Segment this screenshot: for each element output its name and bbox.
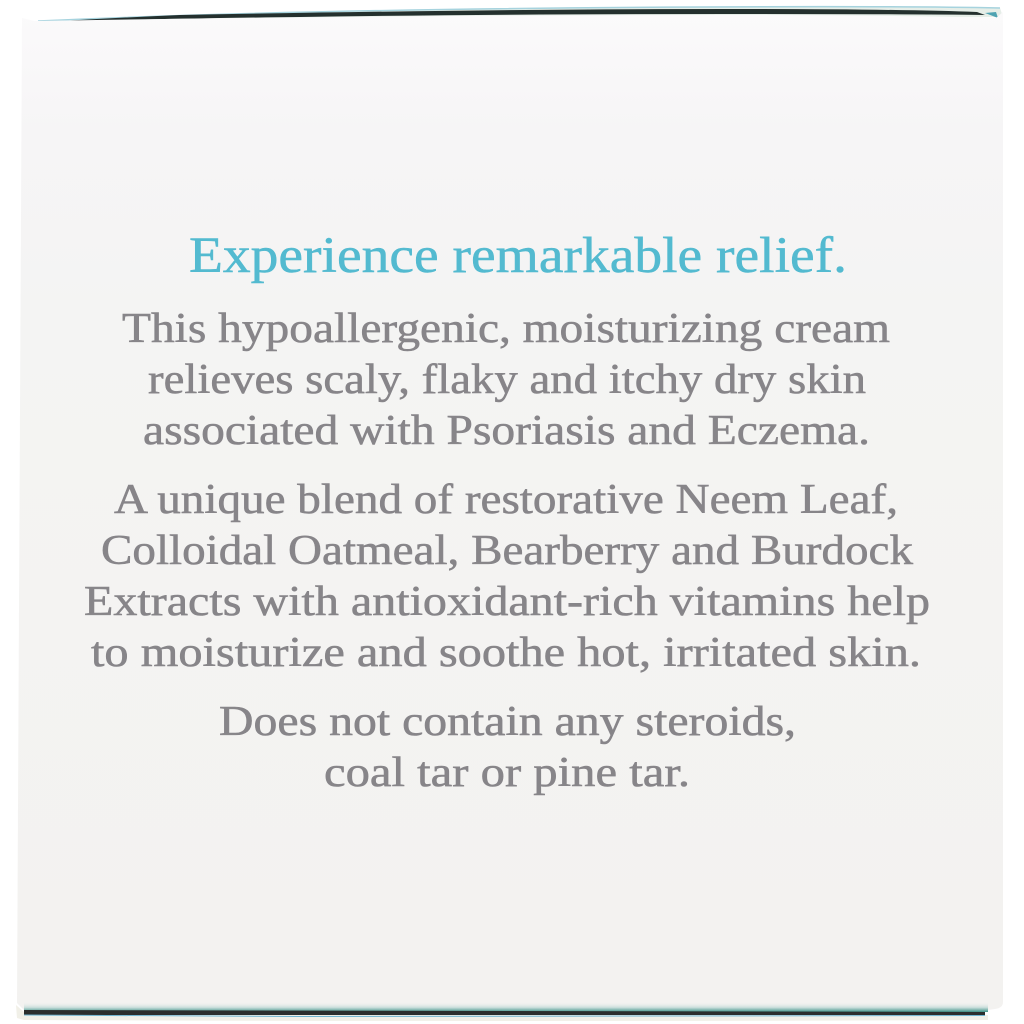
paragraph: ingredient blend: A unique blend of restorative Neem Leaf, [114, 477, 898, 523]
paragraph: ingredient blend: to moisturize and soothe hot, irritated skin. [91, 630, 921, 676]
paragraph: exclusions [219, 699, 796, 796]
box bottom edge [16, 1002, 988, 1021]
paragraph: what the cream relieves [122, 306, 890, 454]
heading: Experience remarkable relief. [189, 228, 847, 284]
paragraph: exclusions: coal tar or pine tar. [324, 750, 690, 796]
paragraph: ingredient blend [84, 477, 930, 676]
paragraph: exclusions: Does not contain any steroids, [219, 699, 796, 745]
paragraph: ingredient blend: Extracts with antioxidant-rich vitamins help [84, 579, 930, 625]
paragraph: what the cream relieves: relieves scaly, flaky and itchy dry skin [148, 357, 866, 403]
paragraph: what the cream relieves: associated with Psoriasis and Eczema. [143, 408, 870, 454]
paragraph: what the cream relieves: This hypoallergenic, moisturizing cream [122, 306, 890, 352]
box top edge [38, 7, 1003, 23]
paragraph: ingredient blend: Colloidal Oatmeal, Bearberry and Burdock [101, 528, 913, 574]
